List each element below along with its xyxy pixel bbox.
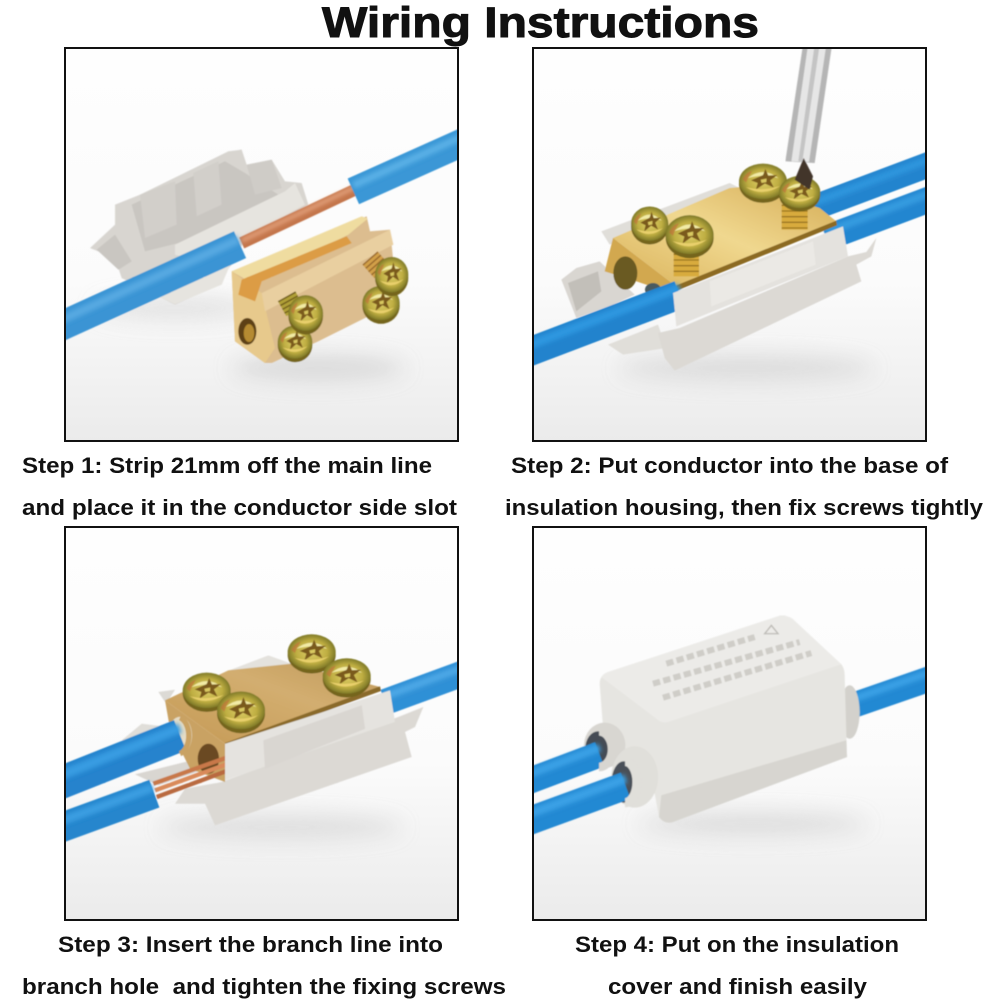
panel: step 1 photo xyxy=(58,48,465,441)
brass conductor xyxy=(165,664,381,782)
insulation cover xyxy=(600,616,847,823)
housing base xyxy=(90,150,308,305)
housing xyxy=(122,655,423,825)
housing upper clip xyxy=(225,690,395,780)
step 3 caption: Step 3: Insert the branch line into xyxy=(58,932,443,957)
panel: step 2 photo xyxy=(526,45,933,441)
step 1 caption xyxy=(22,453,458,520)
step 3 caption xyxy=(22,932,506,999)
brass conductor xyxy=(232,216,398,363)
title: Wiring Instructions xyxy=(322,0,759,47)
screws xyxy=(278,257,408,362)
right wire and gland xyxy=(840,671,933,739)
step 3 caption: branch hole and tighten the fixing screws xyxy=(22,974,506,999)
lower cable gland xyxy=(526,746,658,822)
step 2 caption: insulation housing, then fix screws tightly xyxy=(505,495,984,520)
step 1 caption: and place it in the conductor side slot xyxy=(22,495,458,520)
step 2 caption: Step 2: Put conductor into the base of xyxy=(511,453,949,478)
main wire xyxy=(353,135,465,191)
branch wire xyxy=(58,788,154,829)
right wire xyxy=(385,667,465,702)
step 4 caption: cover and finish easily xyxy=(608,974,868,999)
stripped branch wire xyxy=(153,757,228,797)
upper cable gland xyxy=(526,723,625,782)
screws xyxy=(183,634,371,733)
step 4 caption xyxy=(575,932,899,999)
brass conductor xyxy=(605,186,837,296)
step 4 caption: Step 4: Put on the insulation xyxy=(575,932,899,957)
branch wire with stripped end xyxy=(58,187,355,327)
main wire xyxy=(58,718,189,784)
left wire xyxy=(526,288,680,353)
screwdriver xyxy=(785,45,832,190)
panel: step 3 photo xyxy=(58,527,465,920)
step 2 caption xyxy=(505,453,984,520)
step 1 caption: Step 1: Strip 21mm off the main line xyxy=(22,453,432,478)
panel: step 4 photo xyxy=(526,527,933,920)
right wires xyxy=(813,158,933,238)
housing back and cradles xyxy=(561,183,740,355)
housing front clip xyxy=(658,226,876,371)
screws xyxy=(631,164,820,276)
